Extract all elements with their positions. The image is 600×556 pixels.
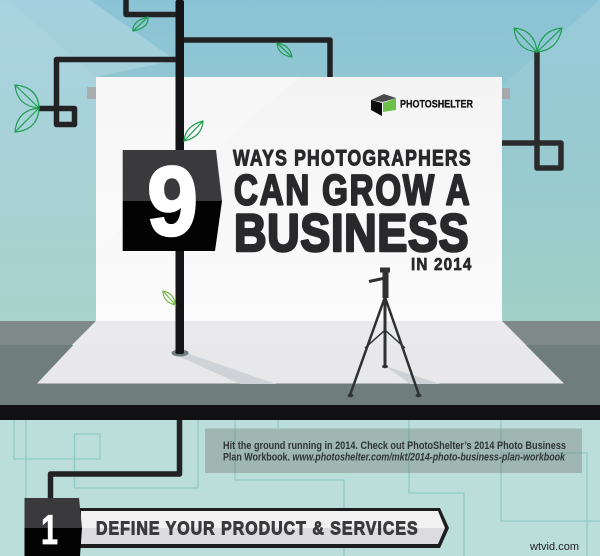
main stem shadow [178, 352, 276, 384]
branch: upper left of main stem [126, 0, 180, 14]
numeral 1: 1 [41, 506, 58, 553]
watermark: wtvid.com [529, 541, 579, 553]
step 1 banner [78, 508, 449, 548]
backdrop tab left [87, 87, 96, 99]
number badge 1 [24, 498, 82, 556]
tripod [348, 268, 422, 397]
icon: leaf near top branch [133, 17, 148, 31]
step 1 heading: DEFINE YOUR PRODUCT & SERVICES [96, 517, 418, 539]
title line 3: BUSINESS [234, 204, 469, 263]
title [233, 147, 472, 274]
main stem base [172, 350, 188, 356]
title line 4: IN 2014 [411, 254, 472, 274]
numeral 9: 9 [147, 146, 198, 256]
logo icon [371, 94, 396, 116]
logo: PhotoShelter [371, 94, 473, 116]
lower section background [0, 420, 600, 556]
branch: left branch with square loop [39, 60, 180, 124]
icon: leaf under long branch [277, 43, 292, 57]
number badge 9 [123, 146, 222, 256]
main stem [176, 0, 184, 354]
right sprout with square loop [502, 28, 562, 168]
title line 1: WAYS PHOTOGRAPHERS [233, 147, 471, 171]
icon: leaf low on stem [163, 291, 176, 305]
lower section outlined pattern [14, 420, 600, 556]
white floor sweep [37, 321, 564, 384]
title line 2: CAN GROW A [234, 166, 470, 215]
dark divider band [0, 405, 600, 420]
icon: leaf on stem in backdrop [184, 121, 203, 141]
branch: long right branch behind backdrop [180, 40, 330, 80]
studio floor [0, 321, 600, 405]
tripod shadow [385, 366, 440, 384]
background: studio wall [0, 0, 600, 321]
backdrop screen [96, 77, 502, 321]
connector to step 1 [50, 420, 180, 500]
callout box [205, 428, 582, 473]
logo wordmark: PHOTOSHELTER [400, 98, 473, 110]
icon: twin leaves on left sprout [15, 85, 39, 132]
backdrop tab right [502, 88, 510, 99]
